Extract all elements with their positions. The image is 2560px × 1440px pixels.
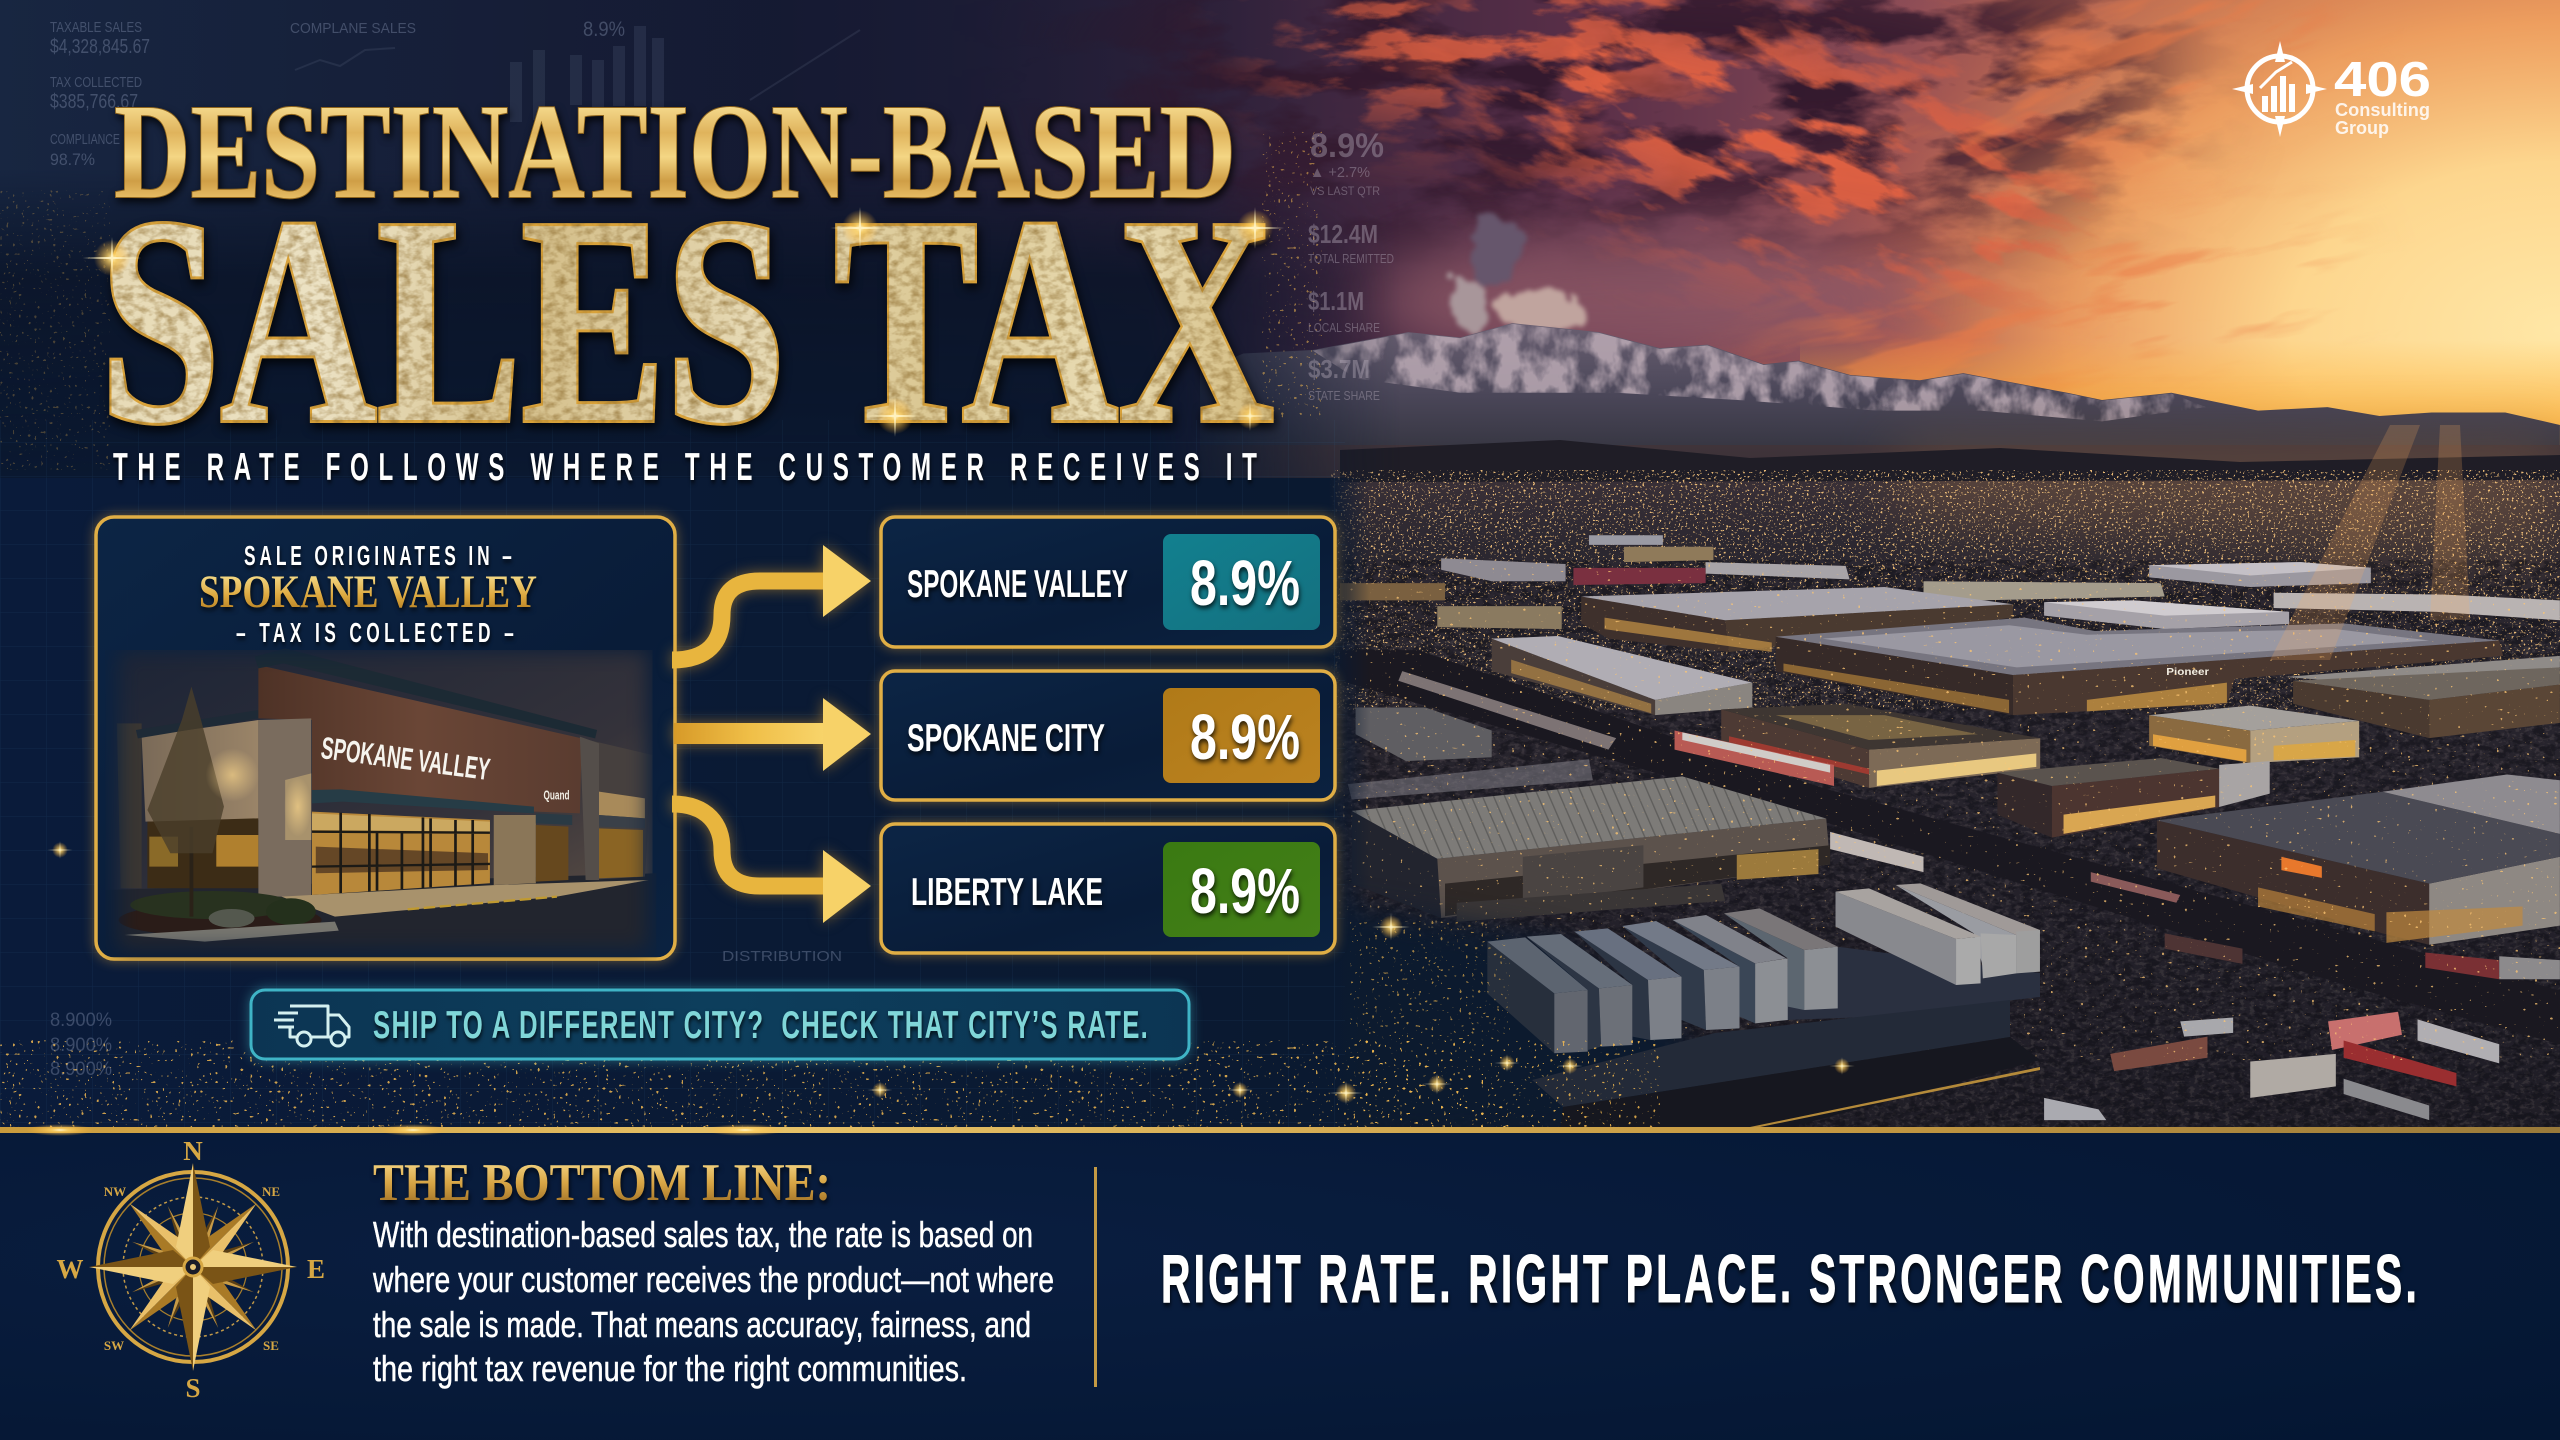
small tan store <box>2149 706 2359 763</box>
ghost dashboard figures: left: 8.900% <box>50 1010 112 1031</box>
mountain range <box>1200 323 2560 457</box>
ghost dashboard figures: left: 8.9% <box>583 18 625 41</box>
shipping trailers <box>1487 883 2040 1053</box>
icon: compass rose: NW <box>104 1184 126 1199</box>
ghost dashboard figures: left: TAXABLE SALES <box>50 19 142 36</box>
icon: compass rose: NE <box>262 1184 280 1199</box>
icon: compass rose: SW <box>104 1338 124 1353</box>
logo: 406 Consulting Group: Consulting <box>2335 100 2430 120</box>
text block: bottom line body: the sale is made. That means accuracy, fairness, and <box>373 1304 1031 1345</box>
ghost dashboard figures: right: LOCAL SHARE <box>1308 320 1380 335</box>
front left warehouse <box>1352 776 1830 918</box>
origin caption: – TAX IS COLLECTED – <box>236 617 514 648</box>
text block: bottom line body: the right tax revenue for the right communities. <box>373 1348 967 1389</box>
destination card: Liberty Lake: LIBERTY LAKE <box>911 871 1103 914</box>
ghost dashboard figures: right: TOTAL REMITTED <box>1308 251 1394 266</box>
logo: 406 Consulting Group: 406 <box>2334 53 2431 107</box>
destination card: Spokane City: SPOKANE CITY <box>907 717 1105 760</box>
destination card: Liberty Lake: 8.9% <box>1190 855 1300 927</box>
small left warehouse <box>1356 708 1492 761</box>
ghost dashboard figures: right: 8.9% <box>1310 127 1384 165</box>
heading: the bottom line: THE BOTTOM LINE: <box>373 1154 831 1212</box>
ghost dashboard figures: left: 8.900% <box>50 1059 112 1080</box>
light rays <box>2270 425 2470 660</box>
icon: compass rose: E <box>307 1254 325 1284</box>
icon: compass rose <box>56 1136 325 1403</box>
ghost dashboard figures: left: COMPLANE SALES <box>290 20 416 37</box>
side warehouse left <box>1492 636 1752 715</box>
navy left panel overlays <box>0 0 1400 1138</box>
ground lights and parked cars texture <box>1330 470 2560 1130</box>
text block: bottom line body <box>372 1214 1054 1389</box>
panel: origin store <box>96 517 675 960</box>
icon: compass rose: N <box>183 1136 203 1166</box>
text block: bottom line body: where your customer receives the product—not where <box>372 1259 1054 1300</box>
lower lot with navy fade <box>1300 900 2040 1140</box>
destination card: Spokane Valley: SPOKANE VALLEY <box>907 563 1128 606</box>
arrow: to Liberty Lake <box>672 804 871 923</box>
aerial city and warehouses photo <box>1200 425 2560 1140</box>
vertical divider <box>1094 1167 1097 1387</box>
store photo <box>105 648 656 960</box>
icon: compass with bars <box>2232 41 2327 137</box>
ghost dashboard figures: left: TAX COLLECTED <box>50 74 142 91</box>
destination card: Spokane Valley: 8.9% <box>1190 547 1300 619</box>
ghost dashboard figures: right: STATE SHARE <box>1308 388 1380 403</box>
logo: 406 Consulting Group <box>2232 41 2431 138</box>
origin caption <box>199 540 537 648</box>
large back warehouse <box>1581 587 2013 652</box>
bottom band <box>0 1130 2560 1440</box>
main warehouse: Pioneer <box>2166 667 2209 677</box>
right warehouse <box>2285 656 2560 738</box>
title: sales tax: TAX <box>834 157 1274 485</box>
ghost dashboard figures: right <box>1308 127 1394 403</box>
ghost dashboard figures: right: $3.7M <box>1308 354 1370 384</box>
logo: 406 Consulting Group: Group <box>2335 118 2389 138</box>
text block: bottom line body: With destination-based sales tax, the rate is based on <box>373 1214 1033 1255</box>
destination card: Spokane City: 8.9% <box>1190 701 1300 773</box>
lot vehicles <box>2044 1012 2499 1120</box>
store photo: Quand <box>543 788 570 802</box>
ghost dashboard figures: left: $385,766.67 <box>50 91 138 113</box>
big right warehouse <box>2157 774 2560 945</box>
icon: compass rose: S <box>185 1373 201 1403</box>
subtitle: THE RATE FOLLOWS WHERE THE CUSTOMER RECEIVES IT <box>113 445 1257 488</box>
destination card: Spokane Valley <box>881 517 1335 647</box>
far buildings <box>1340 535 2560 629</box>
brown store <box>1997 758 2270 838</box>
ghost dashboard figures: right: $12.4M <box>1308 219 1378 249</box>
tagline: RIGHT RATE. RIGHT PLACE. STRONGER COMMUNITIES. <box>1161 1240 2417 1317</box>
ghost dashboard figures: left <box>50 18 842 1080</box>
main warehouse <box>1776 618 2503 715</box>
ghost dashboard figures: left: 8.900% <box>50 1035 112 1056</box>
title: destination-based: DESTINATION-BASED <box>114 77 1236 227</box>
destination card: Spokane City <box>881 671 1335 800</box>
sky background <box>0 0 2560 480</box>
title glints <box>83 207 1284 437</box>
ghost dashboard figures: left: DISTRIBUTION <box>722 948 842 965</box>
ghost dashboard figures: right: $1.1M <box>1308 286 1364 316</box>
arrow: to Spokane City <box>674 698 871 771</box>
icon: compass rose: W <box>56 1254 84 1284</box>
title: sales tax: SALES <box>100 157 786 485</box>
center flat roof store <box>1721 704 2040 788</box>
ghost dashboard figures: left: COMPLIANCE <box>50 131 120 148</box>
warehouse district <box>1340 535 2560 1120</box>
icon: compass rose: SE <box>263 1338 279 1353</box>
vehicle rows <box>1348 671 2560 979</box>
ghost bar chart <box>295 26 860 122</box>
lower sparkles <box>47 841 1855 1105</box>
callout: ship to a different city <box>251 990 1189 1059</box>
origin caption: SALE ORIGINATES IN – <box>244 540 512 571</box>
ghost dashboard figures: right: VS LAST QTR <box>1310 184 1380 198</box>
callout: ship to a different city: SHIP TO A DIFFERENT CITY? CHECK THAT CITY’S RATE. <box>373 1004 1148 1047</box>
ghost dashboard figures: left: 98.7% <box>50 150 95 169</box>
origin caption: SPOKANE VALLEY <box>199 566 537 618</box>
ghost dashboard figures: left: $4,328,845.67 <box>50 36 150 58</box>
arrow: to Spokane Valley <box>672 545 871 660</box>
storefront sign: SPOKANE VALLEY <box>319 730 492 787</box>
gold dust particles <box>0 130 1660 1130</box>
ghost dashboard figures: right: ▲ +2.7% <box>1310 164 1370 181</box>
road network <box>1340 650 2560 1044</box>
gold divider rule <box>0 1124 2560 1136</box>
lit windows scattered over buildings <box>1330 560 2560 1060</box>
icon: delivery truck <box>274 1006 349 1046</box>
destination card: Liberty Lake <box>881 824 1335 953</box>
